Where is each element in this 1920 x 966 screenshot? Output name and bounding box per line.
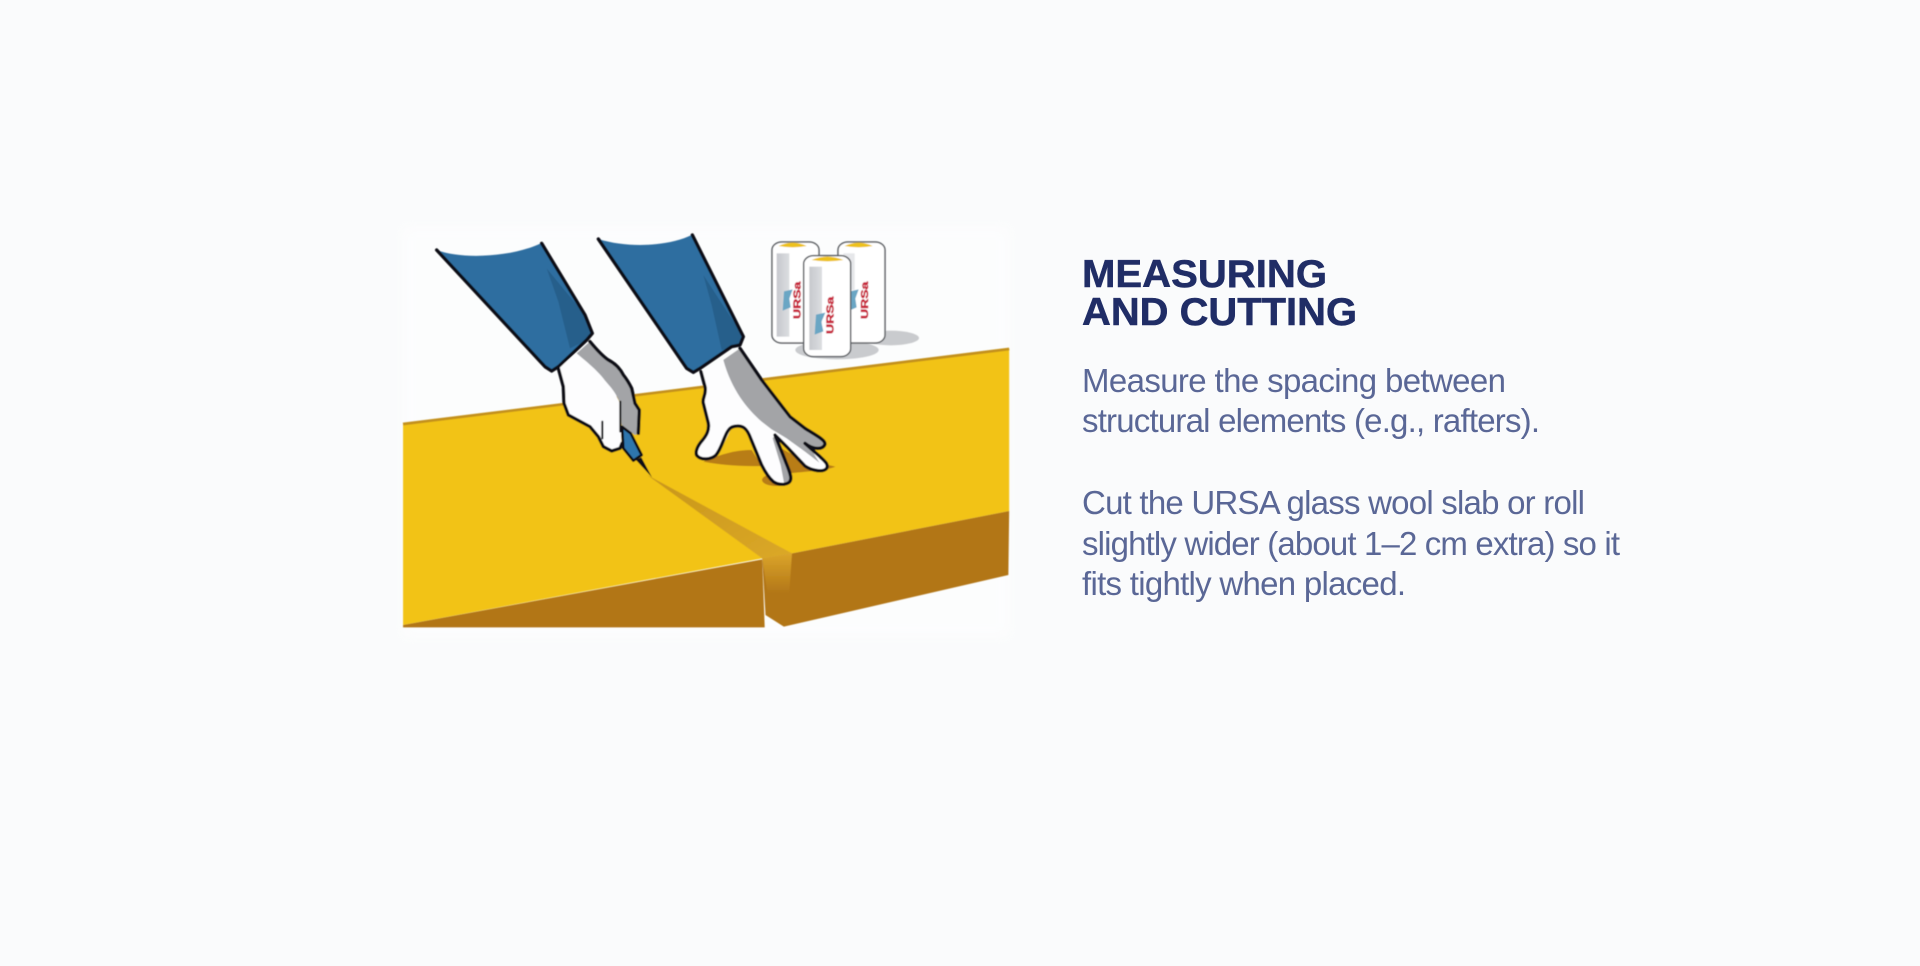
- roll: front: [804, 256, 851, 357]
- left glove: [558, 342, 639, 451]
- paragraph: cut: slightly wider (about 1–2 cm extra) so it: [1082, 525, 1620, 562]
- paragraph: measure: structural elements (e.g., rafters).: [1082, 402, 1540, 439]
- paragraph: cut: fits tightly when placed.: [1082, 565, 1406, 602]
- left hand shadows on slab: [703, 447, 835, 486]
- roll: back right: URSa: [860, 281, 871, 319]
- heading: MEASURING: [1082, 253, 1327, 296]
- left sleeve: [437, 243, 592, 371]
- knife: [622, 427, 652, 477]
- paragraph: measure: Measure the spacing between: [1082, 362, 1506, 399]
- roll: back left: [772, 242, 819, 343]
- illustration: hands cutting insulation slab: [403, 235, 1009, 627]
- insulation slab: [403, 348, 1009, 627]
- heading: AND CUTTING: [1082, 291, 1357, 334]
- paragraph: cut: Cut the URSA glass wool slab or roll: [1082, 484, 1585, 521]
- insulation roll packages: [772, 242, 919, 359]
- right sleeve: [598, 235, 743, 372]
- right glove: [696, 348, 827, 484]
- roll: back left: URSa: [793, 281, 804, 319]
- roll: back right: [838, 242, 885, 343]
- roll: front: URSa: [825, 296, 836, 334]
